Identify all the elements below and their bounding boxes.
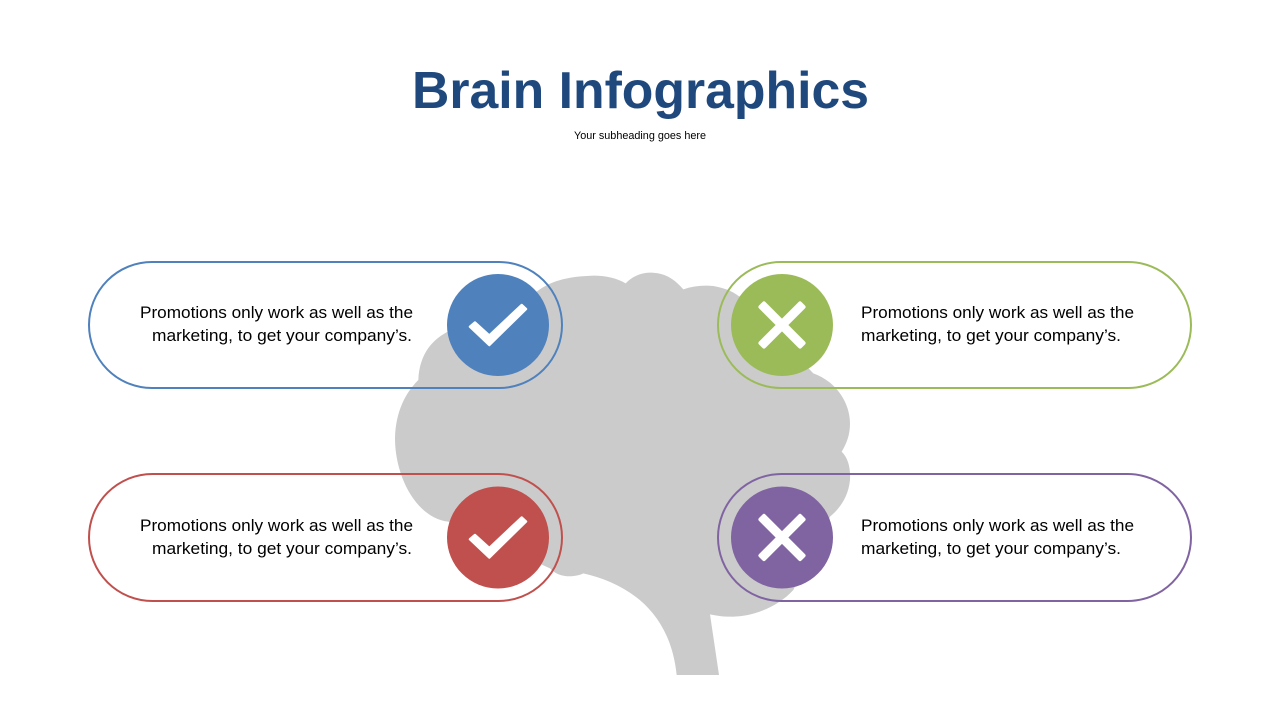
text block: green: Promotions only work as well as the — [861, 303, 1134, 322]
pill outline: purple — [718, 474, 1191, 601]
panel: bottom right — [718, 474, 1191, 601]
text block: purple: marketing, to get your company’s. — [861, 539, 1121, 558]
icon: blue check — [447, 274, 549, 376]
panel: top right — [718, 262, 1191, 388]
pill outline: blue — [89, 262, 562, 388]
text block: purple: Promotions only work as well as the — [861, 516, 1134, 535]
text block: green: marketing, to get your company’s. — [861, 326, 1121, 345]
text block: red: Promotions only work as well as the — [140, 516, 413, 535]
text block: blue: Promotions only work as well as the — [140, 303, 413, 322]
title: Brain Infographics — [412, 62, 869, 120]
text block: blue: marketing, to get your company’s. — [152, 326, 412, 345]
text block: red: marketing, to get your company’s. — [152, 539, 412, 558]
icon: green cross — [731, 274, 833, 376]
icon: red check — [447, 486, 549, 588]
panel: bottom left — [89, 474, 562, 601]
panel: top left — [89, 262, 562, 388]
brain silhouette — [395, 273, 850, 675]
subheading: Your subheading goes here — [574, 130, 706, 142]
pill outline: green — [718, 262, 1191, 388]
icon: purple cross — [731, 486, 833, 588]
pill outline: red — [89, 474, 562, 601]
